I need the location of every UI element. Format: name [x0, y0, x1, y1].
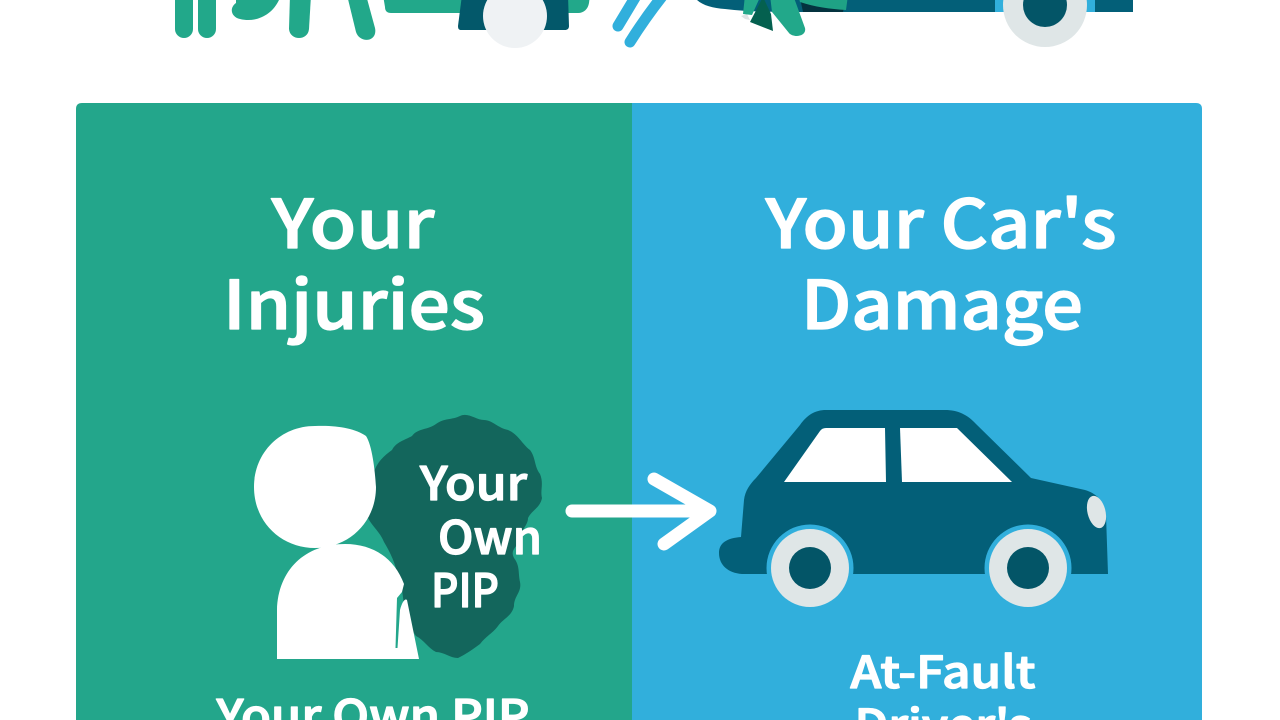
icon: rear wheel [760, 524, 860, 624]
speech blob: your own PIP: PIP [431, 555, 499, 621]
panel: your injuries [76, 103, 632, 720]
icon: left car lower body [383, 0, 590, 48]
heading: your car's damage: Damage [801, 252, 1083, 349]
icon: blue impact lines [618, 0, 664, 42]
heading: your car's damage: Your Car's [764, 171, 1116, 268]
icon: figure legs over right car [741, 0, 848, 36]
icon: cropped crash illustration at top [175, 0, 1133, 48]
text: at-fault driver's caption: At-Fault [850, 637, 1036, 701]
icon: person silhouette [254, 426, 419, 659]
icon: front wheel [978, 524, 1078, 624]
heading: your injuries: Your [270, 171, 435, 268]
icon: car windows [784, 428, 1012, 482]
heading: your injuries: Injuries [223, 252, 485, 349]
arrow: from person to car [572, 479, 710, 544]
speech blob: your own PIP: Own [438, 502, 542, 568]
icon: headlight [1084, 494, 1109, 530]
panel: your car's damage [632, 103, 1202, 720]
icon: right car lower body and wheel [693, 0, 1133, 47]
icon: person with PIP cloud [254, 415, 542, 659]
speech blob: your own PIP: Your [419, 448, 527, 514]
speech blob: your own PIP [367, 415, 542, 658]
icon: green figure legs [175, 0, 375, 40]
icon: car [719, 410, 1109, 624]
